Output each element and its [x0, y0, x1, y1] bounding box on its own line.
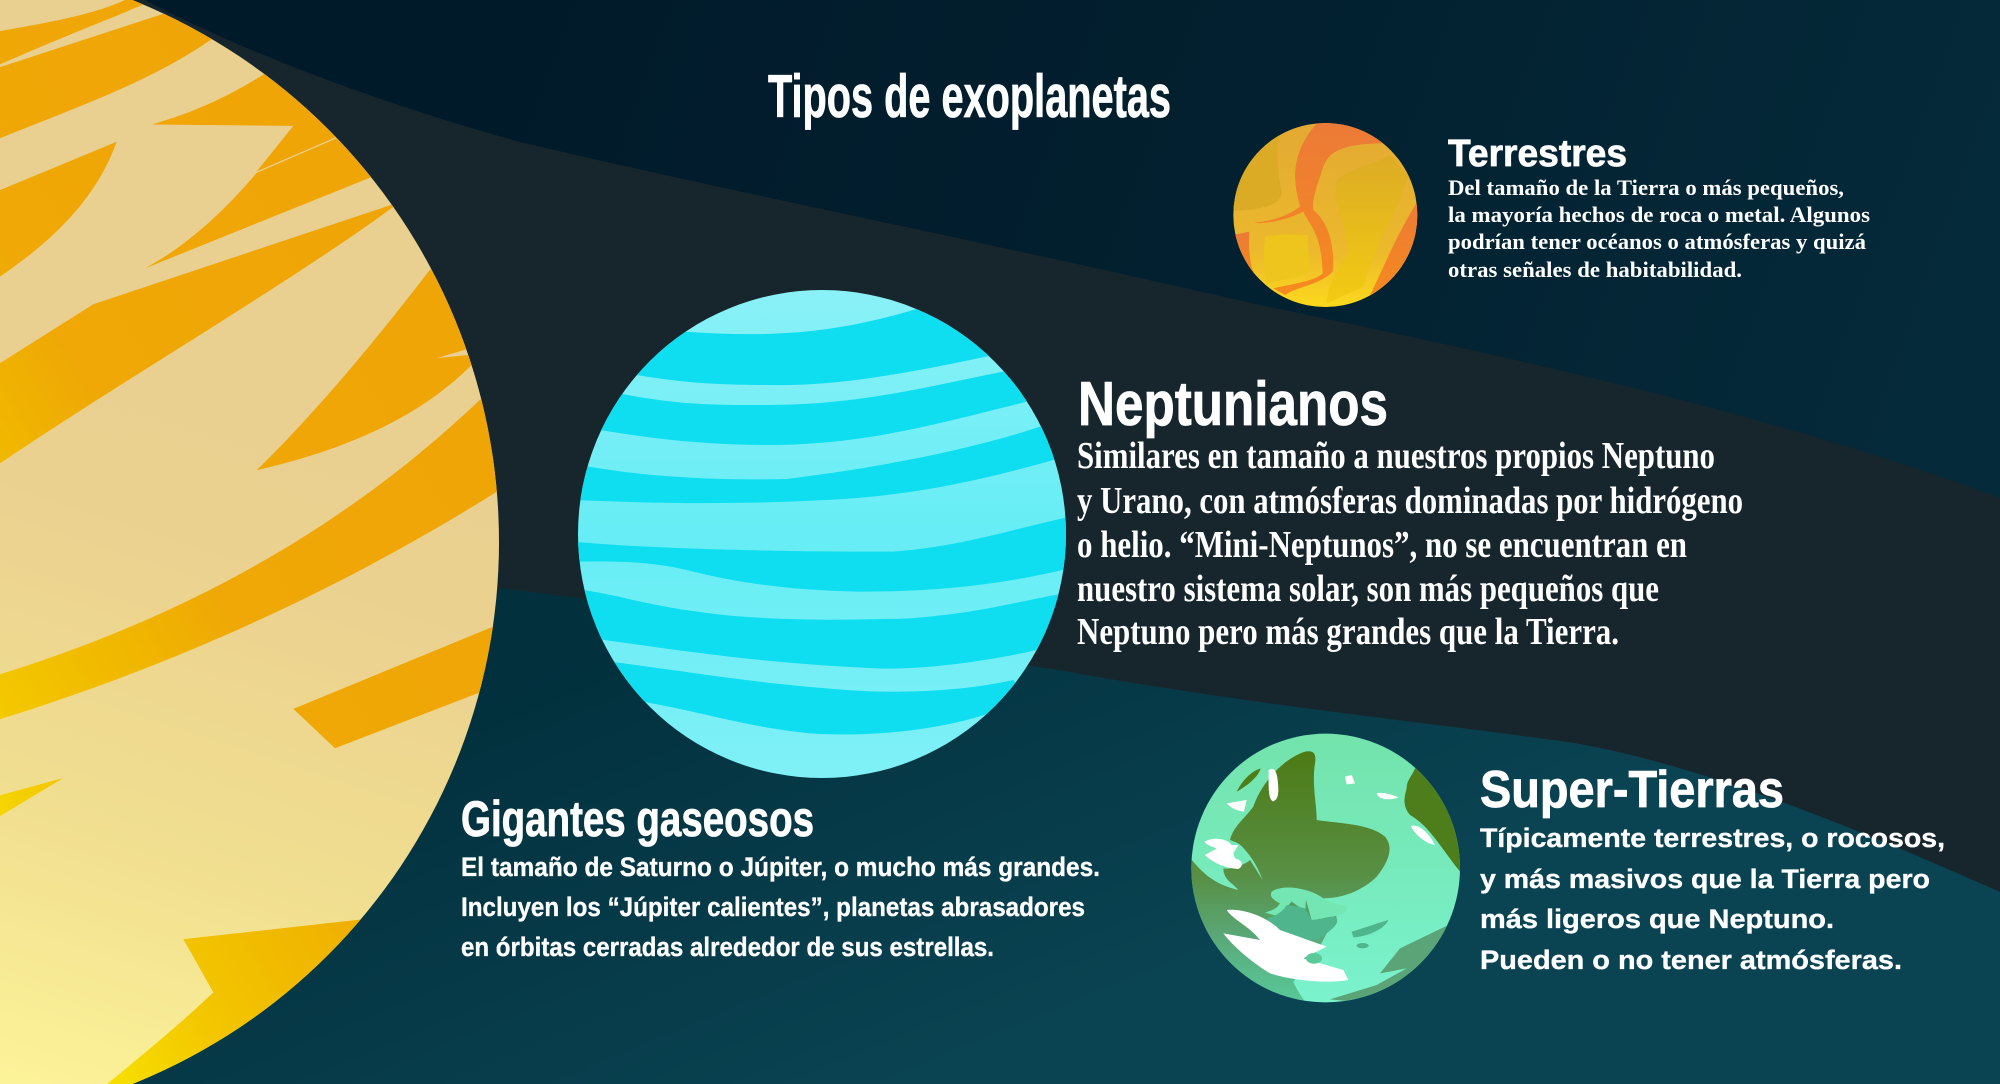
icon: terrestrial planet — [1230, 120, 1423, 307]
title: Tipos de exoplanetas — [768, 63, 1171, 130]
panel: super-tierras — [1183, 734, 1945, 1007]
heading: terrestres: Terrestres — [1448, 133, 1627, 175]
panel: gigantes gaseosos — [0, 0, 1100, 1084]
text block: super-tierras: más ligeros que Neptuno. — [1480, 904, 1834, 934]
text block: terrestres: Del tamaño de la Tierra o más pequeños, — [1448, 175, 1844, 200]
heading: neptunianos: Neptunianos — [1078, 370, 1388, 439]
heading: super-tierras: Super-Tierras — [1480, 761, 1784, 819]
text block: neptunianos: nuestro sistema solar, son más pequeños que — [1077, 568, 1659, 610]
text block: neptunianos: o helio. “Mini-Neptunos”, no se encuentran en — [1077, 524, 1687, 566]
icon: giant gas planet — [0, 0, 540, 1084]
text block: super-tierras — [1480, 823, 1945, 975]
text block: terrestres: otras señales de habitabilidad. — [1448, 257, 1742, 282]
text block: terrestres: la mayoría hechos de roca o metal. Algunos — [1448, 202, 1870, 227]
text block: gigantes gaseosos: en órbitas cerradas alrededor de sus estrellas. — [461, 932, 994, 962]
text block: gigantes gaseosos: Incluyen los “Júpiter calientes”, planetas abrasadores — [461, 892, 1085, 922]
text block: neptunianos: Neptuno pero más grandes que la Tierra. — [1077, 611, 1619, 653]
text block: neptunianos: Similares en tamaño a nuestros propios Neptuno — [1077, 435, 1715, 477]
text block: gigantes gaseosos: El tamaño de Saturno o Júpiter, o mucho más grandes. — [461, 852, 1100, 882]
heading: gigantes gaseosos: Gigantes gaseosos — [461, 791, 814, 847]
text block: super-tierras: y más masivos que la Tierra pero — [1480, 864, 1930, 894]
text block: super-tierras: Típicamente terrestres, o rocosos, — [1480, 823, 1945, 853]
text block: gigantes gaseosos — [461, 852, 1100, 962]
icon: super-earth planet — [1183, 734, 1467, 1007]
text block: super-tierras: Pueden o no tener atmósferas. — [1480, 945, 1902, 975]
panel: neptunianos — [563, 290, 1743, 778]
icon: neptune-like planet — [563, 290, 1080, 778]
text block: terrestres: podrían tener océanos o atmósferas y quizá — [1448, 229, 1866, 254]
text block: neptunianos: y Urano, con atmósferas dominadas por hidrógeno — [1077, 480, 1743, 522]
text block: neptunianos — [1077, 435, 1743, 653]
panel: terrestres — [1230, 120, 1870, 307]
text block: terrestres — [1448, 175, 1870, 282]
